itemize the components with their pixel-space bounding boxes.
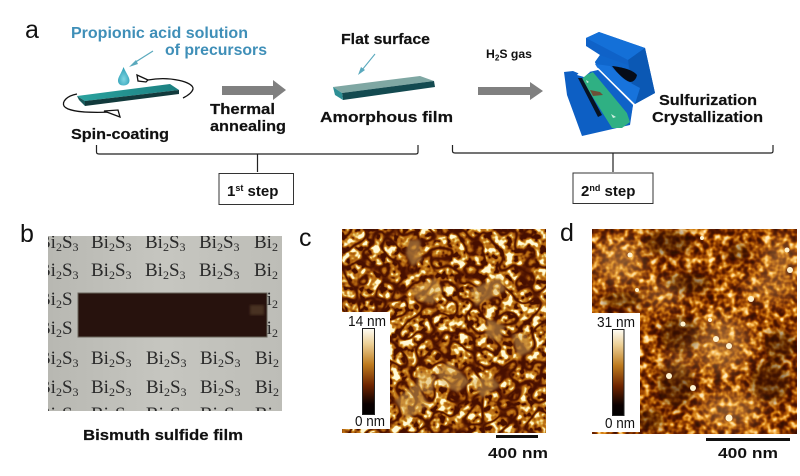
printed Bi2S3 text rows: Bi — [91, 260, 109, 281]
scale bar d: 400 nm — [718, 445, 778, 462]
printed Bi2S3 text rows: Bi — [38, 232, 56, 253]
printed Bi2S3 text rows: S — [62, 377, 73, 398]
bracket: 1st step — [96, 145, 418, 172]
box: 1st step: step — [243, 183, 278, 200]
printed Bi2S3 text rows: 2 — [164, 356, 170, 370]
printed Bi2S3 text rows: 2 — [273, 385, 279, 399]
colorbar c: 14 nm — [348, 313, 386, 330]
printed Bi2S3 text rows: 2 — [56, 356, 62, 370]
panel b: photo of bismuth sulfide film — [48, 236, 282, 411]
icon: tube furnace — [564, 32, 655, 136]
printed Bi2S3 text rows: Bi — [38, 377, 56, 398]
icon: amorphous film — [333, 76, 435, 100]
icon: spinning substrate — [77, 84, 179, 106]
printed Bi2S3 text rows: Bi — [38, 404, 56, 425]
panel label d: d — [560, 219, 574, 247]
panel d: AFM image of crystallized film — [592, 229, 797, 434]
label: sulfurization crystallization: Sulfurization — [659, 92, 757, 109]
printed Bi2S3 text rows: S — [115, 260, 126, 281]
scale bar c — [488, 435, 548, 462]
printed Bi2S3 text rows: 2 — [273, 356, 279, 370]
printed Bi2S3 text rows: 2 — [163, 240, 169, 254]
printed Bi2S3 text rows: 3 — [126, 412, 132, 426]
printed Bi2S3 text rows: Bi — [255, 348, 273, 369]
printed Bi2S3 text rows: 3 — [181, 412, 187, 426]
heading: propionic acid solution of precursors: Propionic acid solution — [71, 25, 248, 42]
printed Bi2S3 text rows: Bi — [199, 260, 217, 281]
printed Bi2S3 text rows: 2 — [272, 326, 278, 340]
printed Bi2S3 text rows: 2 — [56, 297, 62, 311]
arrow: H2S gas flow — [478, 82, 543, 100]
printed Bi2S3 text rows: 3 — [235, 412, 241, 426]
printed Bi2S3 text rows: 3 — [180, 240, 186, 254]
printed Bi2S3 text rows: Bi — [91, 348, 109, 369]
label: H2S gas: S gas — [499, 47, 532, 61]
printed Bi2S3 text rows: Bi — [146, 404, 164, 425]
printed Bi2S3 text rows: 2 — [272, 240, 278, 254]
box: 2nd step: nd — [589, 183, 600, 193]
label: sulfurization crystallization: Crystallization — [652, 109, 763, 126]
printed Bi2S3 text rows: Bi — [199, 232, 217, 253]
box: 1st step: 1 — [227, 183, 235, 200]
printed Bi2S3 text rows: Bi — [91, 377, 109, 398]
printed Bi2S3 text rows: S — [170, 377, 181, 398]
box: 2nd step — [573, 173, 653, 204]
lower block — [564, 68, 633, 136]
printed Bi2S3 text rows: Bi — [200, 377, 218, 398]
printed Bi2S3 text rows: Bi — [200, 348, 218, 369]
printed Bi2S3 text rows: 2 — [109, 412, 115, 426]
printed Bi2S3 text rows: S — [223, 260, 234, 281]
printed Bi2S3 text rows: S — [224, 404, 235, 425]
printed Bi2S3 text rows: 2 — [272, 297, 278, 311]
printed Bi2S3 text rows: 3 — [235, 356, 241, 370]
panel label c: c — [299, 224, 312, 252]
printed Bi2S3 text rows: S — [62, 348, 73, 369]
scale bar d — [706, 438, 790, 462]
label: H2S gas: H — [486, 47, 495, 61]
printed Bi2S3 text rows: 2 — [56, 385, 62, 399]
label: thermal annealing: annealing — [210, 118, 286, 135]
printed Bi2S3 text rows: S — [115, 348, 126, 369]
printed Bi2S3 text rows: 2 — [109, 240, 115, 254]
printed Bi2S3 text rows: 2 — [109, 385, 115, 399]
arrow: to flat surface — [358, 54, 375, 75]
printed Bi2S3 text rows: Bi — [146, 377, 164, 398]
printed Bi2S3 text rows: S — [115, 404, 126, 425]
dark film sample — [78, 293, 267, 337]
colorbar c: 0 nm — [355, 413, 385, 430]
printed Bi2S3 text rows: 2 — [164, 412, 170, 426]
bright particles — [628, 236, 793, 422]
printed Bi2S3 text rows: 3 — [126, 240, 132, 254]
printed Bi2S3 text rows: 2 — [164, 385, 170, 399]
printed Bi2S3 text rows: S — [62, 404, 73, 425]
box: 2nd step: step — [600, 183, 635, 200]
panel a: spin-coating stage — [64, 25, 267, 143]
printed Bi2S3 text rows: 2 — [56, 412, 62, 426]
AFM grain texture — [592, 229, 797, 434]
label: thermal annealing — [210, 101, 286, 135]
panel label a: a — [25, 16, 39, 44]
printed Bi2S3 text rows: 3 — [126, 385, 132, 399]
printed Bi2S3 text rows: 3 — [73, 268, 79, 282]
printed Bi2S3 text rows: S — [223, 232, 234, 253]
printed Bi2S3 text rows: S — [224, 377, 235, 398]
printed Bi2S3 text rows: 3 — [235, 385, 241, 399]
printed Bi2S3 text rows: S — [224, 348, 235, 369]
printed Bi2S3 text rows: 2 — [217, 240, 223, 254]
heading: propionic acid solution of precursors: of precursors — [165, 42, 267, 59]
printed Bi2S3 text rows: S — [115, 377, 126, 398]
printed Bi2S3 text rows: Bi — [91, 404, 109, 425]
bright clusters — [596, 240, 796, 426]
printed Bi2S3 text rows: 3 — [180, 268, 186, 282]
printed Bi2S3 text rows: 2 — [273, 412, 279, 426]
printed Bi2S3 text rows: 3 — [73, 412, 79, 426]
arrow: pointing to droplet — [129, 51, 153, 67]
bracket: 2nd step — [452, 145, 773, 172]
label: H2S gas: 2 — [495, 54, 500, 62]
label: sulfurization crystallization — [652, 92, 763, 126]
printed Bi2S3 text rows: 3 — [126, 268, 132, 282]
panel label b: b — [20, 220, 34, 248]
printed Bi2S3 text rows: Bi — [145, 260, 163, 281]
printed Bi2S3 text rows: 2 — [218, 385, 224, 399]
panel a: amorphous film stage — [320, 31, 453, 126]
printed Bi2S3 text rows: 3 — [73, 385, 79, 399]
printed Bi2S3 text rows: Bi — [38, 260, 56, 281]
label: thermal annealing: Thermal — [210, 101, 275, 118]
printed Bi2S3 text rows: 2 — [163, 268, 169, 282]
printed Bi2S3 text rows: 2 — [218, 412, 224, 426]
icon: droplet — [118, 67, 130, 86]
printed Bi2S3 text rows: S — [62, 260, 73, 281]
printed Bi2S3 text rows: 2 — [217, 268, 223, 282]
printed Bi2S3 text rows: Bi — [145, 232, 163, 253]
printed Bi2S3 text rows: S — [62, 232, 73, 253]
printed Bi2S3 text rows: S — [62, 318, 73, 339]
printed Bi2S3 text rows: 3 — [126, 356, 132, 370]
printed Bi2S3 text rows: Bi — [255, 377, 273, 398]
printed Bi2S3 text rows: Bi — [146, 348, 164, 369]
printed Bi2S3 text rows: 2 — [272, 268, 278, 282]
label: flat surface: Flat surface — [341, 31, 430, 48]
colorbar d — [592, 313, 640, 432]
arrow: thermal annealing — [222, 80, 286, 100]
box: 1st step — [219, 174, 294, 204]
upper block — [586, 32, 655, 104]
label: spin-coating: Spin-coating — [71, 126, 169, 143]
AFM grain texture — [342, 229, 546, 433]
printed Bi2S3 text rows: Bi — [255, 404, 273, 425]
printed Bi2S3 text rows: 2 — [56, 268, 62, 282]
colorbar d: 0 nm — [605, 415, 635, 432]
printed Bi2S3 text rows: Bi — [254, 289, 272, 310]
printed Bi2S3 text rows: Bi — [38, 318, 56, 339]
printed Bi2S3 text rows: S — [169, 232, 180, 253]
lighter large grains — [395, 240, 532, 420]
printed Bi2S3 text rows: 3 — [234, 268, 240, 282]
dark depressions — [600, 231, 796, 430]
printed Bi2S3 text rows: Bi — [38, 348, 56, 369]
colorbar d: 31 nm — [597, 314, 635, 331]
box: 1st step: st — [235, 183, 243, 193]
printed Bi2S3 text rows: Bi — [200, 404, 218, 425]
printed Bi2S3 text rows: 2 — [56, 240, 62, 254]
icon: rotation arrows — [64, 75, 193, 117]
printed Bi2S3 text rows: Bi — [254, 232, 272, 253]
heading: propionic acid solution of precursors — [71, 25, 267, 59]
printed Bi2S3 text rows: S — [169, 260, 180, 281]
printed Bi2S3 text rows: Bi — [254, 318, 272, 339]
box: 2nd step: 2 — [581, 183, 589, 200]
printed Bi2S3 text rows: 2 — [56, 326, 62, 340]
scale bar c: 400 nm — [488, 445, 548, 462]
caption: bismuth sulfide film: Bismuth sulfide film — [83, 427, 243, 444]
printed Bi2S3 text rows: Bi — [91, 232, 109, 253]
printed Bi2S3 text rows: 3 — [234, 240, 240, 254]
printed Bi2S3 text rows: S — [170, 348, 181, 369]
colorbar c — [342, 312, 390, 430]
printed Bi2S3 text rows: 3 — [181, 356, 187, 370]
printed Bi2S3 text rows: 2 — [109, 356, 115, 370]
printed Bi2S3 text rows: 3 — [73, 240, 79, 254]
printed Bi2S3 text rows: 3 — [73, 356, 79, 370]
printed Bi2S3 text rows: 2 — [218, 356, 224, 370]
printed Bi2S3 text rows: 2 — [109, 268, 115, 282]
printed Bi2S3 text rows: S — [170, 404, 181, 425]
panel c: AFM image of amorphous film — [342, 229, 546, 433]
printed Bi2S3 text rows: S — [115, 232, 126, 253]
printed Bi2S3 text rows: Bi — [254, 260, 272, 281]
printed Bi2S3 text rows — [48, 236, 278, 411]
printed Bi2S3 text rows: Bi — [38, 289, 56, 310]
printed Bi2S3 text rows: 3 — [181, 385, 187, 399]
label: amorphous film: Amorphous film — [320, 109, 453, 126]
printed Bi2S3 text rows: S — [62, 289, 73, 310]
